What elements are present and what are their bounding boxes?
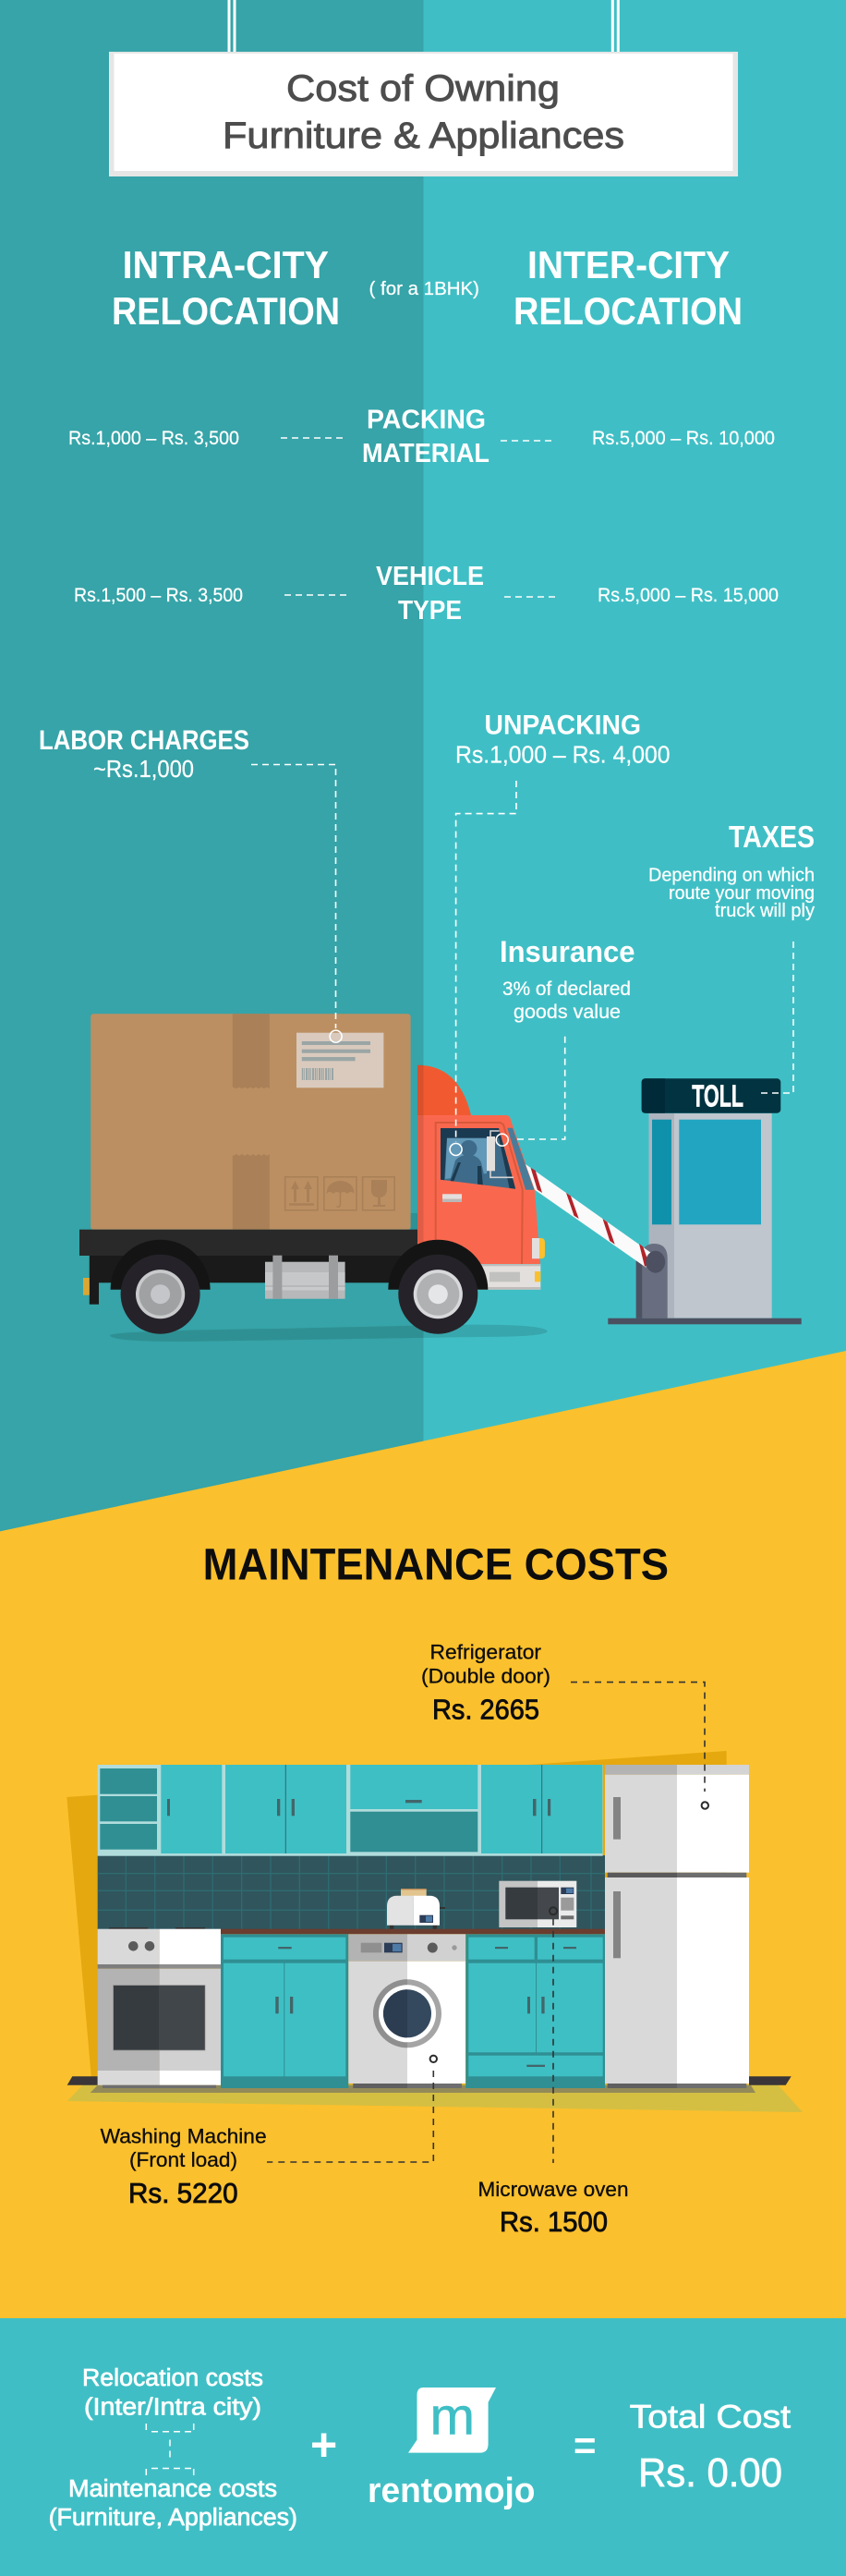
relocation and maintenance costs: Maintenance costs [68, 2476, 277, 2502]
booth base [608, 1318, 802, 1324]
rear wheel [111, 1240, 211, 1334]
row: vehicle type: Rs.5,000 – Rs. 15,000 [598, 584, 779, 606]
truck [79, 1014, 548, 1342]
relocation and maintenance costs: (Furniture, Appliances) [49, 2505, 297, 2531]
toll booth [526, 1078, 802, 1324]
refrigerator [605, 1765, 749, 2088]
total cost [630, 2400, 791, 2496]
total cost: Total Cost [630, 2400, 791, 2436]
heading: intra-city relocation [112, 243, 340, 333]
lower cabinet left [221, 1934, 348, 2088]
row: vehicle type: VEHICLE [376, 562, 484, 591]
note: for a 1BHK: ( for a 1BHK) [369, 279, 479, 299]
cab window and driver [441, 1128, 515, 1189]
callout: washing machine: Rs. 5220 [128, 2177, 238, 2209]
row: packing material: Rs.1,000 – Rs. 3,500 [68, 427, 239, 449]
callout: taxes: route your moving [669, 883, 815, 904]
upper cabinets [98, 1765, 603, 1856]
row: vehicle type: Rs.1,500 – Rs. 3,500 [74, 584, 243, 606]
bumper [471, 1264, 540, 1290]
callout: insurance: 3% of declared [502, 978, 631, 1000]
row: packing material: MATERIAL [362, 439, 489, 468]
barrier post [636, 1244, 668, 1318]
callout: taxes: Depending on which [648, 866, 815, 886]
cardboard box [91, 1014, 411, 1230]
callout: microwave oven [478, 1907, 628, 2238]
rentomojo logo: rentomojo [368, 2472, 536, 2510]
washing machine [348, 1934, 465, 2088]
callout: labor charges [39, 725, 342, 1042]
row: vehicle type [74, 562, 779, 626]
booth body [649, 1113, 772, 1318]
heading: inter-city relocation [514, 243, 743, 333]
callout: unpacking: UNPACKING [484, 710, 641, 740]
equals sign: = [574, 2424, 597, 2467]
toaster [387, 1889, 445, 1929]
callout: refrigerator: (Double door) [421, 1665, 550, 1688]
handling icons [285, 1177, 394, 1210]
stove [98, 1927, 221, 2088]
row: vehicle type: TYPE [398, 596, 462, 626]
row: packing material: PACKING [367, 405, 486, 434]
callout: refrigerator: Rs. 2665 [432, 1693, 539, 1725]
panel: maintenance background [0, 1351, 846, 2319]
cab [417, 1065, 545, 1290]
total cost: Rs. 0.00 [638, 2451, 782, 2496]
barrier arm [526, 1164, 665, 1273]
chassis [79, 1230, 417, 1305]
callout: insurance: Insurance [500, 935, 635, 968]
callout: refrigerator [421, 1641, 708, 1809]
rentomojo logo [368, 2388, 536, 2510]
tile backsplash [98, 1855, 605, 1929]
fuel tank [265, 1256, 345, 1299]
shipping label [296, 1033, 383, 1088]
title text [223, 68, 624, 156]
title text: Cost of Owning [286, 68, 560, 109]
backdrop shape [66, 1751, 728, 2090]
toll sign: TOLL [692, 1080, 743, 1114]
relocation and maintenance costs: (Inter/Intra city) [84, 2395, 261, 2421]
floor [67, 2076, 803, 2112]
heading: intra-city relocation: RELOCATION [112, 289, 340, 333]
callout: unpacking [450, 710, 671, 1155]
front wheel [388, 1240, 488, 1334]
callout: microwave oven: Microwave oven [478, 2178, 628, 2201]
callout: insurance: goods value [514, 1002, 621, 1023]
callout: labor charges: LABOR CHARGES [39, 725, 249, 756]
title sign [109, 0, 738, 176]
heading: maintenance costs: MAINTENANCE COSTS [203, 1539, 669, 1589]
relocation and maintenance costs [49, 2365, 297, 2531]
truck shadow [110, 1325, 548, 1342]
heading: intra-city relocation: INTRA-CITY [123, 243, 329, 286]
row: packing material [68, 405, 775, 468]
callout: microwave oven: Rs. 1500 [500, 2205, 608, 2238]
callout: taxes [648, 820, 815, 1093]
headlight [539, 1238, 545, 1258]
callout: washing machine: Washing Machine [101, 2125, 267, 2148]
callout: washing machine: (Front load) [129, 2148, 237, 2171]
panel: total cost footer [0, 2318, 846, 2576]
rentomojo logo: m [430, 2388, 475, 2447]
countertop [221, 1929, 605, 1934]
callout: taxes: TAXES [729, 820, 815, 854]
callout: taxes: truck will ply [715, 901, 815, 921]
row: packing material: Rs.5,000 – Rs. 10,000 [592, 427, 775, 449]
callout: insurance [496, 935, 635, 1146]
callout: refrigerator: Refrigerator [430, 1641, 541, 1664]
plus sign: + [310, 2419, 337, 2471]
toll sign [642, 1078, 780, 1114]
heading: inter-city relocation: INTER-CITY [527, 243, 730, 286]
logo speech bubble [408, 2388, 496, 2453]
callout: labor charges: ~Rs.1,000 [93, 755, 194, 783]
lower cabinet right [465, 1934, 605, 2088]
heading: inter-city relocation: RELOCATION [514, 289, 743, 333]
kitchen [66, 1751, 803, 2112]
panel: relocation background [0, 0, 846, 1571]
callout: washing machine [101, 2056, 437, 2209]
callout: unpacking: Rs.1,000 – Rs. 4,000 [455, 741, 671, 769]
relocation and maintenance costs: Relocation costs [82, 2365, 263, 2391]
microwave [499, 1881, 576, 1927]
title text: Furniture & Appliances [223, 115, 624, 156]
